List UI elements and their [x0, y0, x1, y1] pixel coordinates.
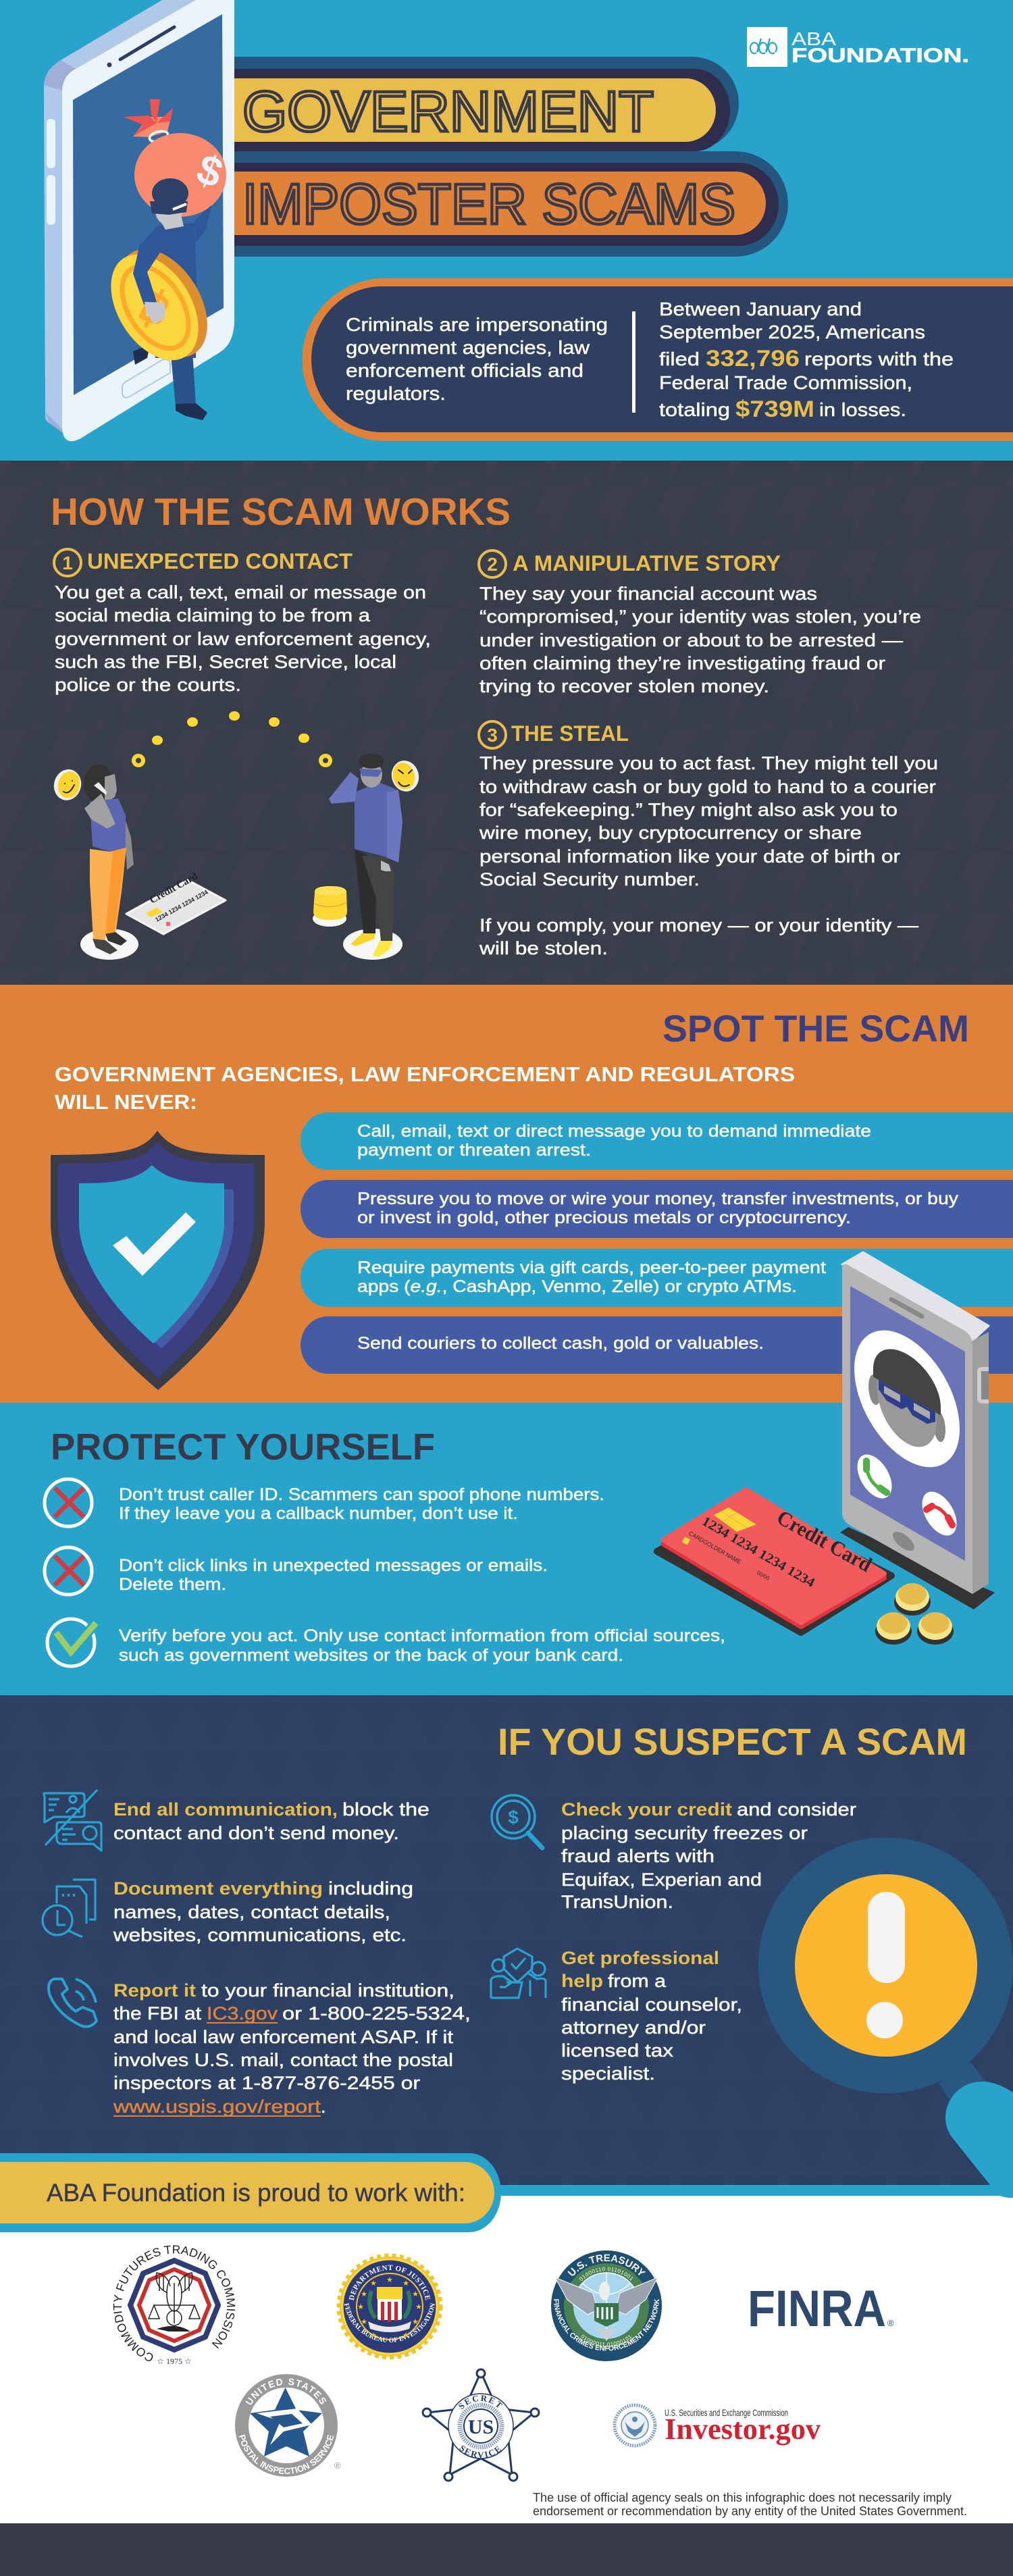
item: report it: and local law enforcement ASAP. If it [113, 2027, 454, 2047]
banner: partner intro: ABA Foundation is proud to work with: [47, 2179, 465, 2207]
step 2: a manipulative story: under investigation or about to be arrested — [479, 630, 903, 650]
text: FTC report statistics: reports with the [804, 349, 954, 369]
item: get professional help [491, 1948, 742, 2084]
icon: magnifier with dollar [492, 1795, 542, 1848]
illustration: credit card and coins: 1234 1234 1234 1234 [700, 1514, 817, 1591]
tip: verify [47, 1619, 725, 1666]
bar: immediate payment: Call, email, text or direct message you to demand immediate [357, 1122, 871, 1141]
bar: couriers [301, 1316, 1013, 1374]
logo: ABA Foundation: FOUNDATION. [791, 45, 969, 67]
logo: SEC Investor.gov [615, 2405, 821, 2446]
step 3: the steal: 3 [487, 725, 498, 746]
tip: links: Don’t click links in unexpected messages or emails. [119, 1556, 548, 1575]
seal: FBI: ★ [402, 2279, 409, 2288]
dotted signal arc [132, 711, 332, 767]
icon: hero phone with thief [44, 0, 234, 441]
item: check your credit: $ [508, 1807, 519, 1828]
seal: FBI [336, 2253, 443, 2360]
logo: FINRA: ® [887, 2318, 894, 2328]
avatar: masked scammer [854, 1308, 960, 1490]
text: disclaimer: endorsement or recommendation by any entity of the United States Government. [533, 2504, 967, 2518]
seal: FBI: ★ [386, 2276, 393, 2284]
tip: caller id: Don’t trust caller ID. Scammers can spoof phone numbers. [119, 1485, 604, 1504]
subheading: agencies will never: GOVERNMENT AGENCIES, LAW ENFORCEMENT AND REGULATORS [55, 1062, 795, 1086]
bitcoin coin: ฿ [132, 279, 179, 336]
heading: if you suspect a scam: IF YOU SUSPECT A SCAM [498, 1720, 967, 1763]
logo: ABA Foundation [747, 27, 969, 67]
tip: links [45, 1547, 548, 1595]
item: document everything: websites, communications, etc. [113, 1925, 407, 1945]
text: FTC report statistics [659, 299, 954, 422]
step 1: unexpected contact [54, 549, 431, 695]
seal: FinCEN: FINANCIAL CRIMES ENFORCEMENT NETWORK [554, 2299, 659, 2351]
hero background [0, 0, 1013, 461]
bar: gift cards: Require payments via gift cards, peer-to-peer payment [357, 1258, 826, 1277]
item: report it: or 1-800-225-5324, [282, 2003, 471, 2024]
icon: shield with check [51, 1131, 265, 1390]
icon: answer call [858, 1447, 891, 1506]
item: get professional help: licensed tax [561, 2040, 674, 2061]
bitcoin coin [93, 233, 226, 376]
step 3: the steal: Social Security number. [479, 869, 700, 890]
illustration: credit card and coins: Credit Card [773, 1505, 876, 1576]
text: FTC report statistics: September 2025, Americans [659, 321, 925, 342]
tip: caller id [45, 1479, 604, 1526]
icon: crossed-out chat [44, 1790, 101, 1851]
text: criminals intro: government agencies, law [346, 337, 590, 358]
money bag: $ [191, 145, 229, 197]
illustration: phone call between victim and scammer [51, 711, 422, 960]
bar: gift cards [301, 1249, 1013, 1307]
panel: partners background [0, 2196, 1013, 2523]
step 3: the steal: will be stolen. [479, 938, 608, 958]
item: get professional help: attorney and/or [561, 2017, 706, 2038]
seal: FBI: ★ [412, 2290, 419, 2298]
heading: spot the scam: SPOT THE SCAM [663, 1007, 969, 1050]
seal: US Postal Inspection Service: UNITED STATES [246, 2379, 326, 2404]
seal: CFTC: ☆ 1975 ☆ [157, 2356, 192, 2366]
tip: links: Delete them. [119, 1575, 226, 1594]
seal: FBI: ★ [370, 2279, 377, 2288]
step 1: unexpected contact: social media claiming to be from a [55, 605, 371, 625]
icon: decline call [923, 1484, 956, 1543]
step 1: unexpected contact: 1 [62, 552, 73, 573]
step 3: the steal [479, 721, 938, 958]
victim figure [51, 765, 138, 960]
item: document everything: Document everything [113, 1878, 323, 1899]
icon: document with magnifier [43, 1880, 95, 1937]
panel: how the scam works [0, 461, 1013, 985]
bar: immediate payment [301, 1112, 1013, 1170]
step 3: the steal: THE STEAL [511, 721, 629, 746]
item: report it: inspectors at 1-877-876-2455 or [113, 2073, 420, 2093]
seal: Secret Service: US [468, 2416, 494, 2438]
panel: protect yourself [0, 1403, 1013, 1695]
step 2: a manipulative story: often claiming they’re investigating fraud or [479, 653, 885, 673]
text: criminals intro: enforcement officials and [346, 360, 583, 381]
item: check your credit: and consider [737, 1799, 856, 1820]
step 3: the steal: If you comply, your money — or your identity — [479, 915, 918, 935]
title banner [234, 57, 788, 257]
seal: FinCEN [551, 2250, 662, 2361]
seal: FBI: ★ [361, 2290, 367, 2298]
item: report it: www.uspis.gov/report [113, 2096, 321, 2117]
step 3: the steal: to withdraw cash or buy gold to hand to a courier [479, 777, 936, 797]
seal: FinCEN: 01000011 01000101 [581, 2334, 632, 2346]
text: criminals intro [346, 314, 608, 404]
item: report it: involves U.S. mail, contact the postal [113, 2050, 453, 2070]
bar: couriers: Send couriers to collect cash, gold or valuables. [357, 1334, 764, 1353]
logo: ABA Foundation: ABA [791, 28, 836, 49]
icon: telephone [49, 1979, 97, 2027]
illustration: credit card and coins [657, 1490, 954, 1645]
item: end all communication [44, 1790, 430, 1851]
text: FTC report statistics: 332,796 [706, 346, 800, 371]
item: get professional help: Get professional [561, 1948, 719, 1968]
item: end all communication: contact and don’t send money. [113, 1823, 399, 1843]
step 2: a manipulative story [479, 550, 921, 696]
credit card on floor: 1234 1234 1234 1234 [154, 889, 209, 923]
text: disclaimer: The use of official agency seals on this infographic does not necessarily imply [533, 2491, 952, 2504]
seal: US Postal Inspection Service: ® [334, 2461, 341, 2471]
text: disclaimer [533, 2491, 967, 2518]
credit card on floor [126, 871, 226, 934]
logo: SEC Investor.gov: Investor.gov [665, 2413, 821, 2446]
seal: Secret Service: SECRET [459, 2395, 502, 2410]
item: document everything: including [328, 1878, 413, 1899]
footer band [0, 2523, 1013, 2576]
title pill: imposter scams: IMPOSTER SCAMS [242, 172, 735, 236]
step 2: a manipulative story: 2 [487, 554, 498, 575]
heading: protect yourself: PROTECT YOURSELF [51, 1426, 435, 1468]
text: FTC report statistics: in losses. [819, 399, 906, 420]
illustration: credit card and coins: CARDGOLDER NAME [687, 1530, 742, 1566]
credit card on floor: Credit Card [148, 871, 200, 906]
item: check your credit: placing security freezes or [561, 1823, 808, 1843]
item: report it: IC3.gov [207, 2003, 278, 2024]
tip: verify: such as government websites or the back of your bank card. [119, 1646, 623, 1665]
step 2: a manipulative story: They say your financial account was [479, 584, 817, 604]
item: document everything: names, dates, contact details, [113, 1902, 390, 1922]
text: criminals intro: regulators. [346, 383, 446, 404]
bar: immediate payment: payment or threaten arrest. [357, 1141, 591, 1160]
text: FTC report statistics: filed [659, 349, 700, 369]
money bag [124, 99, 229, 217]
seal: US Postal Inspection Service: POSTAL INSPECTION SERVICE [239, 2434, 334, 2475]
thief figure [93, 178, 226, 420]
item: check your credit: TransUnion. [561, 1892, 673, 1912]
item: end all communication: block the [342, 1799, 430, 1820]
seal: FBI: DEPARTMENT OF JUSTICE [348, 2265, 431, 2300]
item: report it: the FBI at [113, 2003, 202, 2024]
text: FTC report statistics: Federal Trade Commission, [659, 372, 912, 393]
tip: caller id: If they leave you a callback number, don’t use it. [119, 1504, 518, 1523]
bar: move money: Pressure you to move or wire your money, transfer investments, or buy [357, 1189, 959, 1208]
bar: move money: or invest in gold, other precious metals or cryptocurrency. [357, 1208, 851, 1227]
seal: FBI: ★ [402, 2332, 409, 2340]
icon: cyan divider band [0, 2185, 1013, 2196]
seal: FBI: ★ [361, 2318, 367, 2326]
item: check your credit: fraud alerts with [561, 1846, 715, 1866]
text: FTC report statistics: totaling [659, 399, 730, 420]
item: report it: Report it [113, 1980, 196, 2001]
step 1: unexpected contact: You get a call, text, email or message on [55, 582, 426, 602]
logo: SEC Investor.gov: U.S. Securities and Exchange Commission [665, 2407, 788, 2418]
step 3: the steal: for “safekeeping.” They might also ask you to [479, 800, 898, 820]
tip: verify: Verify before you act. Only use contact information from official sources, [119, 1626, 725, 1645]
seal: FBI: ★ [412, 2318, 419, 2326]
illustration: credit card and coins: 00/00 [756, 1570, 771, 1582]
subheading: agencies will never: WILL NEVER: [55, 1090, 197, 1114]
illustration: smartphone incoming scam call [840, 1252, 995, 1609]
step 1: unexpected contact: such as the FBI, Secret Service, local [55, 652, 396, 672]
seal: CFTC: COMMODITY FUTURES TRADING COMMISSION [113, 2245, 235, 2361]
bar: gift cards: apps ( e.g., CashApp, Venmo, Zelle) or crypto ATMs. [357, 1277, 797, 1296]
item: check your credit: Equifax, Experian and [561, 1870, 762, 1890]
step 2: a manipulative story: trying to recover stolen money. [479, 676, 769, 696]
scammer figure [329, 754, 422, 960]
step 2: a manipulative story: A MANIPULATIVE STORY [513, 551, 781, 575]
panel: stats [302, 278, 1013, 441]
seal: FBI: ★ [357, 2303, 364, 2311]
item: get professional help: financial counselor, [561, 1994, 742, 2015]
step 1: unexpected contact: UNEXPECTED CONTACT [87, 549, 353, 573]
step 2: a manipulative story: “compromised,” your identity was stolen, you’re [479, 607, 921, 627]
step 1: unexpected contact: government or law enforcement agency, [55, 629, 431, 649]
item: end all communication: End all communication, [113, 1799, 338, 1820]
bar: move money [301, 1180, 1013, 1238]
item: report it: to your financial institution, [201, 1980, 454, 2001]
coins [875, 1583, 954, 1645]
text: criminals intro: Criminals are impersonating [346, 314, 608, 335]
text: FTC report statistics: Between January and [659, 299, 862, 319]
item: report it: . [321, 2096, 326, 2117]
item: get professional help: help [561, 1971, 603, 1991]
step 3: the steal: They pressure you to act fast. They might tell you [479, 753, 938, 773]
icon: large magnifier with exclamation [758, 1837, 1013, 2198]
step 3: the steal: wire money, buy cryptocurrency or share [479, 823, 862, 843]
seal: FBI: FEDERAL BUREAU OF INVESTIGATION [344, 2303, 435, 2342]
panel: spot the scam [0, 985, 1013, 1403]
seal: FinCEN: 01000110 01101001 [579, 2267, 633, 2281]
item: get professional help: specialist. [561, 2063, 655, 2084]
item: report it [49, 1979, 471, 2117]
step 3: the steal: personal information like your date of birth or [479, 846, 900, 867]
subheading: agencies will never [55, 1062, 795, 1114]
item: check your credit: Check your credit [561, 1799, 732, 1820]
text: FTC report statistics: $739M [735, 396, 814, 422]
seal: US Postal Inspection Service [235, 2374, 341, 2477]
logo: FINRA: FINRA [748, 2280, 886, 2338]
title pill: government: GOVERNMENT [242, 80, 654, 143]
item: get professional help: from a [608, 1971, 667, 1991]
panel: if you suspect a scam [0, 1695, 1013, 2186]
gold coin stack [313, 886, 347, 927]
seal: FinCEN: U.S. TREASURY [567, 2255, 646, 2276]
heading: how the scam works: HOW THE SCAM WORKS [51, 490, 511, 534]
item: document everything [43, 1878, 413, 1945]
item: check your credit [492, 1795, 856, 1912]
step 1: unexpected contact: police or the courts. [55, 675, 241, 695]
seal: Secret Service: SERVICE [459, 2445, 501, 2458]
seal: FBI: ★ [370, 2332, 377, 2340]
banner: partner intro [0, 2153, 501, 2232]
seal: Secret Service [421, 2368, 540, 2481]
seal: FBI: ★ [415, 2303, 422, 2311]
icon: advisor and client [491, 1949, 546, 1998]
